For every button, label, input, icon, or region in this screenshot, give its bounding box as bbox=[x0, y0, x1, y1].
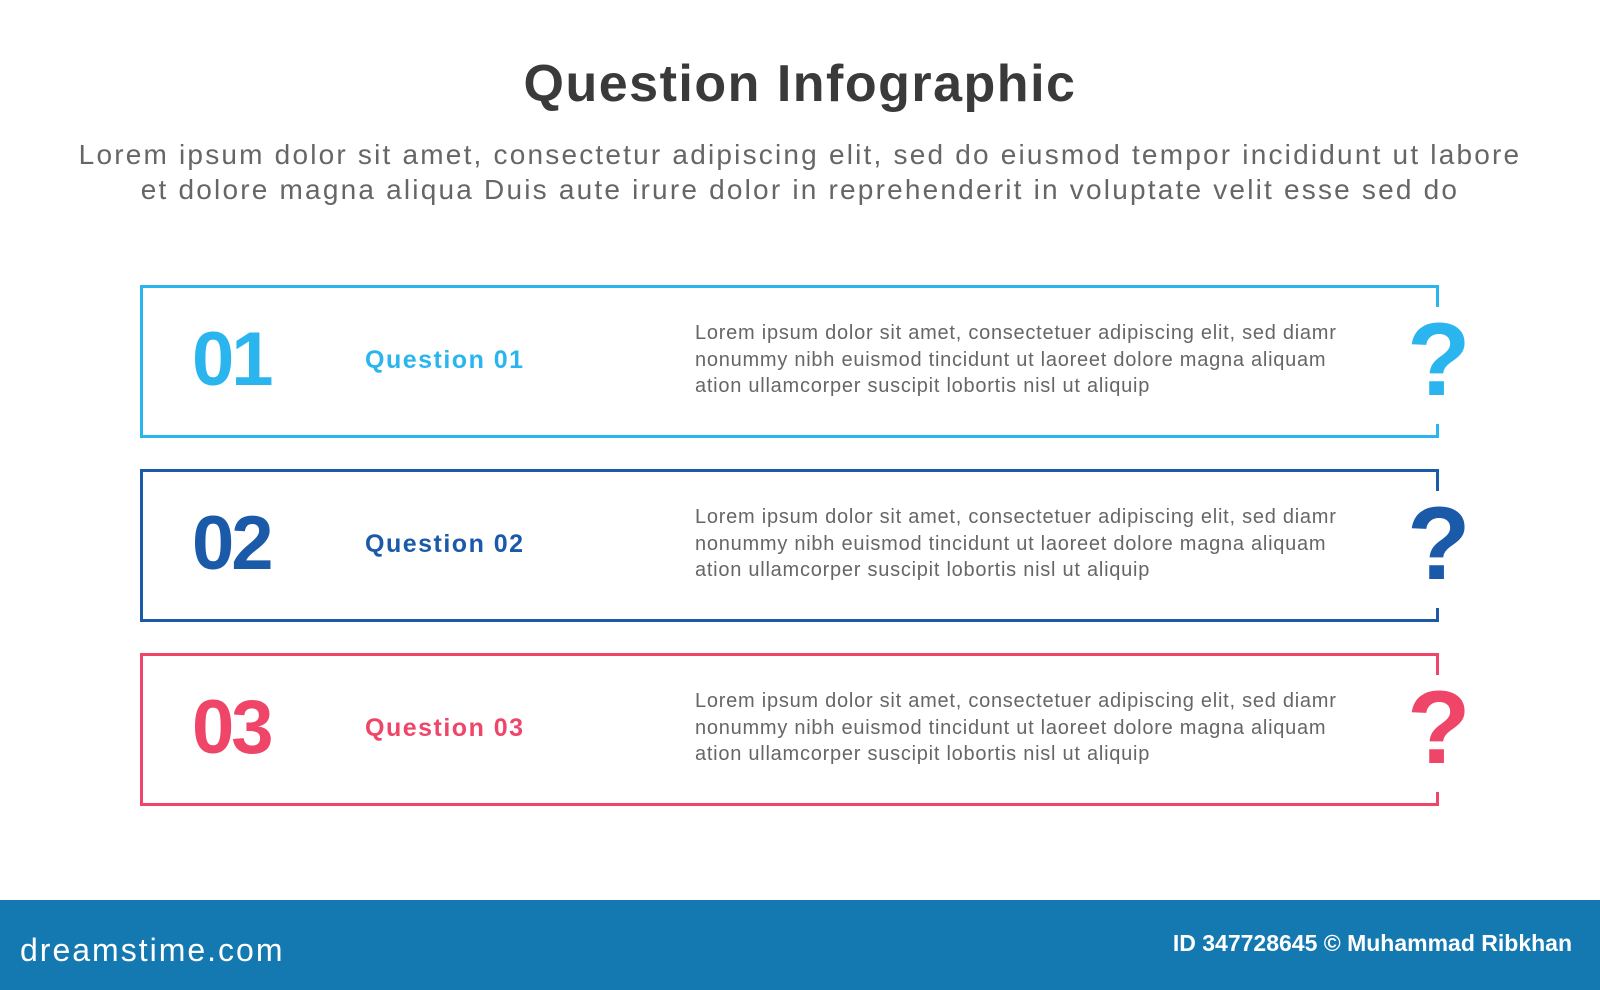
text block 01: Lorem ipsum dolor sit amet, consectetuer adipiscing elit, sed diamr bbox=[695, 322, 1337, 344]
panel: question 01 bbox=[140, 285, 1436, 438]
panel: question 03 bbox=[140, 653, 1436, 806]
label question 03: Question 03 bbox=[365, 714, 525, 742]
footer logo: dreamstime.com bbox=[20, 932, 284, 968]
text block 03: nonummy nibh euismod tincidunt ut laoreet dolore magna aliquam bbox=[695, 716, 1326, 738]
text block 01 bbox=[695, 322, 1337, 397]
text block 03: Lorem ipsum dolor sit amet, consectetuer adipiscing elit, sed diamr bbox=[695, 690, 1337, 712]
icon: question mark 03: ? bbox=[1407, 670, 1471, 786]
text block 02: nonummy nibh euismod tincidunt ut laoreet dolore magna aliquam bbox=[695, 532, 1326, 554]
icon: question mark 02: ? bbox=[1407, 486, 1471, 602]
footer bar bbox=[0, 900, 1600, 990]
text block 02 bbox=[695, 506, 1337, 581]
number 02: 02 bbox=[192, 501, 271, 586]
text block 01: nonummy nibh euismod tincidunt ut laoreet dolore magna aliquam bbox=[695, 348, 1326, 370]
title: Question Infographic bbox=[524, 55, 1076, 113]
text block 01: ation ullamcorper suscipit lobortis nisl ut aliquip bbox=[695, 375, 1150, 397]
text block 02: Lorem ipsum dolor sit amet, consectetuer adipiscing elit, sed diamr bbox=[695, 506, 1337, 528]
label question 02: Question 02 bbox=[365, 530, 525, 558]
panel: question 02 bbox=[140, 469, 1436, 622]
subtitle: et dolore magna aliqua Duis aute irure dolor in reprehenderit in voluptate velit esse sed do bbox=[141, 174, 1459, 205]
number 03: 03 bbox=[192, 685, 271, 770]
icon: question mark 01: ? bbox=[1407, 302, 1471, 418]
text block 03: ation ullamcorper suscipit lobortis nisl ut aliquip bbox=[695, 743, 1150, 765]
subtitle: Lorem ipsum dolor sit amet, consectetur adipiscing elit, sed do eiusmod tempor incididunt ut labore bbox=[79, 139, 1521, 170]
text block 02: ation ullamcorper suscipit lobortis nisl ut aliquip bbox=[695, 559, 1150, 581]
footer credit: ID 347728645 © Muhammad Ribkhan bbox=[1173, 930, 1572, 956]
number 01: 01 bbox=[192, 317, 271, 402]
subtitle bbox=[79, 139, 1521, 205]
label question 01: Question 01 bbox=[365, 346, 525, 374]
text block 03 bbox=[695, 690, 1337, 765]
